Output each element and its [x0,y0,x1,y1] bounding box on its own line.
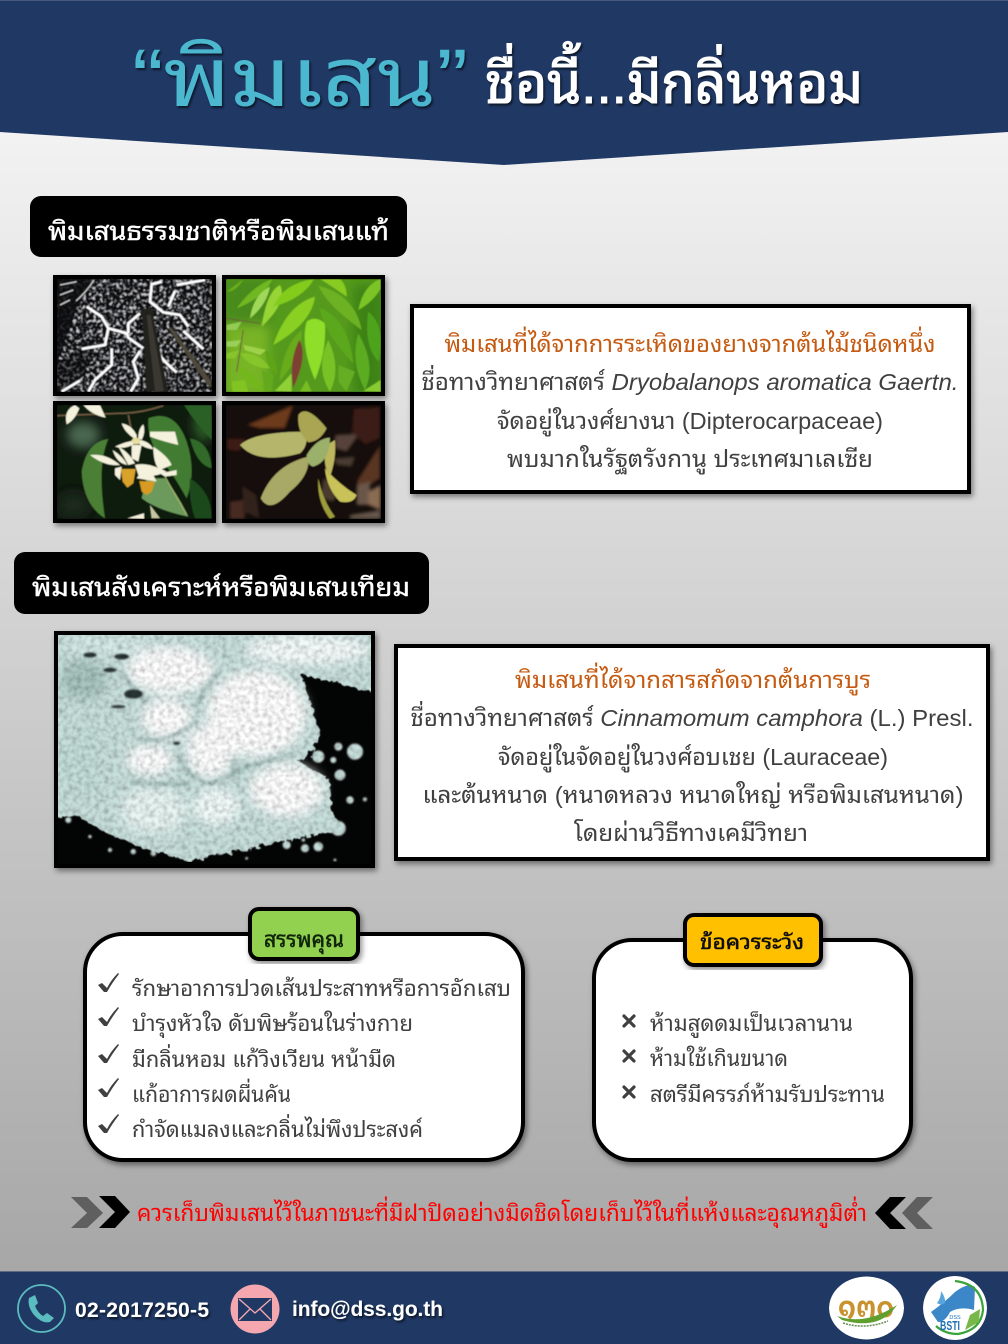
description lines [410,701,974,846]
cautions tag [685,915,821,965]
cautions tag: ข้อควรระวัง [700,932,804,954]
title: ชื่อนี้...มีกลิ่นหอม [485,41,863,115]
title [132,33,863,124]
description lines: ชื่อทางวิทยาศาสตร์ Dryobalanops aromatica Gaertn. [422,365,958,395]
benefits list: รักษาอาการปวดเส้นประสาทหรือการอักเสบ [132,975,511,1001]
email address: info@dss.go.th [292,1298,443,1321]
photo: canopy [53,275,216,396]
panel: benefits [85,909,523,1160]
cautions list [650,1010,885,1107]
description lines: โดยผ่านวิธีทางเคมีวิทยา [574,820,808,846]
icon: phone [18,1285,65,1332]
heading: synthetic borneol [14,552,429,614]
icon: left chevrons [875,1197,933,1229]
logo: anniversary [829,1276,904,1340]
icon: right chevrons [71,1196,130,1228]
cautions list: ห้ามสูดดมเป็นเวลานาน [650,1010,853,1039]
benefits list: บำรุงหัวใจ ดับพิษร้อนในร่างกาย [132,1010,413,1038]
cautions list: ห้ามใช้เกินขนาด [650,1045,788,1071]
icon: email [230,1284,280,1334]
heading: natural borneol [30,196,407,257]
logo: DSS BSTI: BSTI [940,1318,960,1333]
description lines: พบมากในรัฐตรังกานู ประเทศมาเลเซีย [507,446,873,475]
photo: flowers [53,401,216,523]
cautions list: สตรีมีครรภ์ห้ามรับประทาน [650,1081,885,1107]
photo: borneol crystals [50,627,377,868]
benefits list [132,975,511,1142]
panel: cautions [594,915,911,1160]
cautions marks [624,1016,634,1097]
logo: DSS BSTI: DSS [949,1315,961,1321]
heading: natural borneol: พิมเสนธรรมชาติหรือพิมเสนแท้ [48,217,389,246]
description lines [422,365,958,475]
heading: synthetic borneol: พิมเสนสังเคราะห์หรือพิมเสนเทียม [32,572,410,602]
text panel: natural borneol description [412,306,969,492]
photo: leaves [222,275,385,396]
photo grid: natural borneol tree [53,275,385,523]
text panel: synthetic borneol description [396,646,988,859]
benefits tag: สรรพคุณ [264,927,344,954]
title: “พิมเสน” [132,33,468,124]
benefits list: มีกลิ่นหอม แก้วิงเวียน หน้ามืด [132,1043,396,1072]
photo: winged seed [222,401,385,523]
logo: DSS BSTI [923,1276,987,1340]
description lines: จัดอยู่ในจัดอยู่ในวงศ์อบเชย (Lauraceae) [498,744,888,773]
footer band [0,1271,1008,1344]
logo: anniversary: ๑๓๐ [838,1291,894,1324]
storage note with chevrons: ควรเก็บพิมเสนไว้ในภาชนะที่มีฝาปิดอย่างมิดชิดโดยเก็บไว้ในที่แห้งและอุณหภูมิต่ำ [137,1196,867,1229]
storage note with chevrons [71,1196,933,1229]
description lines: ชื่อทางวิทยาศาสตร์ Cinnamomum camphora (L.) Presl. [410,701,974,731]
benefits checks [98,973,119,1133]
phone number: 02-2017250-5 [75,1299,209,1322]
header band [0,0,1008,165]
benefits list: กำจัดแมลงและกลิ่นไม่พึงประสงค์ [132,1113,423,1142]
benefits tag [250,909,358,959]
description heading: พิมเสนที่ได้จากสารสกัดจากต้นการบูร [515,662,871,696]
benefits list: แก้อาการผดผื่นคัน [132,1078,291,1107]
description lines: จัดอยู่ในวงศ์ยางนา (Dipterocarpaceae) [497,408,883,437]
description heading: พิมเสนที่ได้จากการระเหิดของยางจากต้นไม้ชนิดหนึ่ง [444,326,936,358]
description lines: และต้นหนาด (หนาดหลวง หนาดใหญ่ หรือพิมเสนหนาด) [422,782,964,809]
